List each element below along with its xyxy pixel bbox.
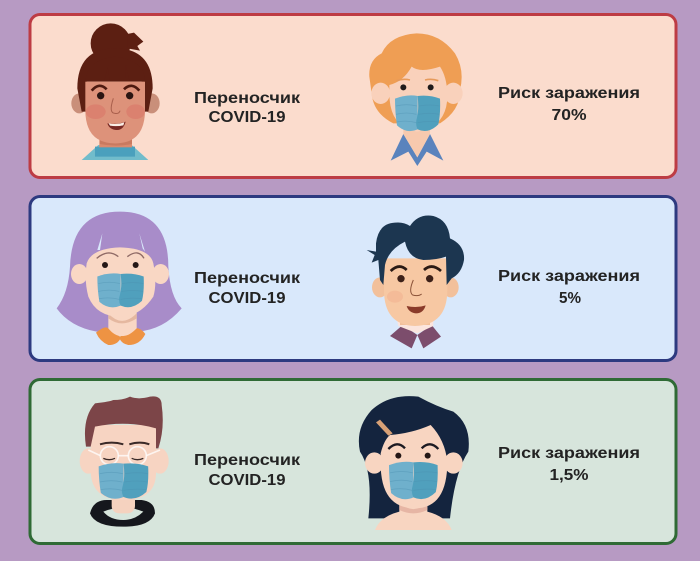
icon: blond man with mask: [369, 33, 463, 166]
text: carrier label: [194, 90, 300, 126]
text: risk 5%: [498, 268, 640, 307]
panel: carrier without mask, 70% risk: [30, 14, 676, 178]
icon: dark-haired man smiling: [367, 216, 464, 348]
panel: carrier masked, 5% risk: [30, 196, 676, 360]
text: carrier label: [194, 452, 300, 489]
text: carrier label: Переносчик: [194, 452, 300, 469]
text: risk 5%: 5%: [559, 290, 581, 307]
text: risk 1,5%: Риск заражения: [498, 445, 640, 462]
icon: purple-haired woman with mask: [57, 212, 182, 345]
panel: both masked, 1.5% risk: [30, 380, 676, 544]
text: risk 70%: Риск заражения: [498, 85, 640, 102]
text: risk 70%: [498, 85, 640, 124]
text: carrier label: Переносчик: [194, 270, 300, 287]
panel background: green: [30, 380, 676, 544]
panel background: red: [30, 14, 676, 178]
text: carrier label: COVID-19: [208, 290, 286, 307]
text: risk 5%: Риск заражения: [498, 268, 640, 285]
text: carrier label: [194, 270, 300, 307]
icon: woman with bun, no mask: [71, 23, 160, 160]
text: carrier label: COVID-19: [208, 472, 286, 489]
text: carrier label: Переносчик: [194, 90, 300, 107]
text: risk 70%: 70%: [552, 107, 587, 124]
icon: man with glasses and mask: [80, 396, 169, 527]
text: carrier label: COVID-19: [208, 109, 286, 126]
text: risk 1,5%: 1,5%: [550, 467, 589, 484]
text: risk 1,5%: [498, 445, 640, 484]
icon: woman with long dark hair and mask: [359, 396, 469, 530]
panel background: blue: [30, 196, 676, 360]
